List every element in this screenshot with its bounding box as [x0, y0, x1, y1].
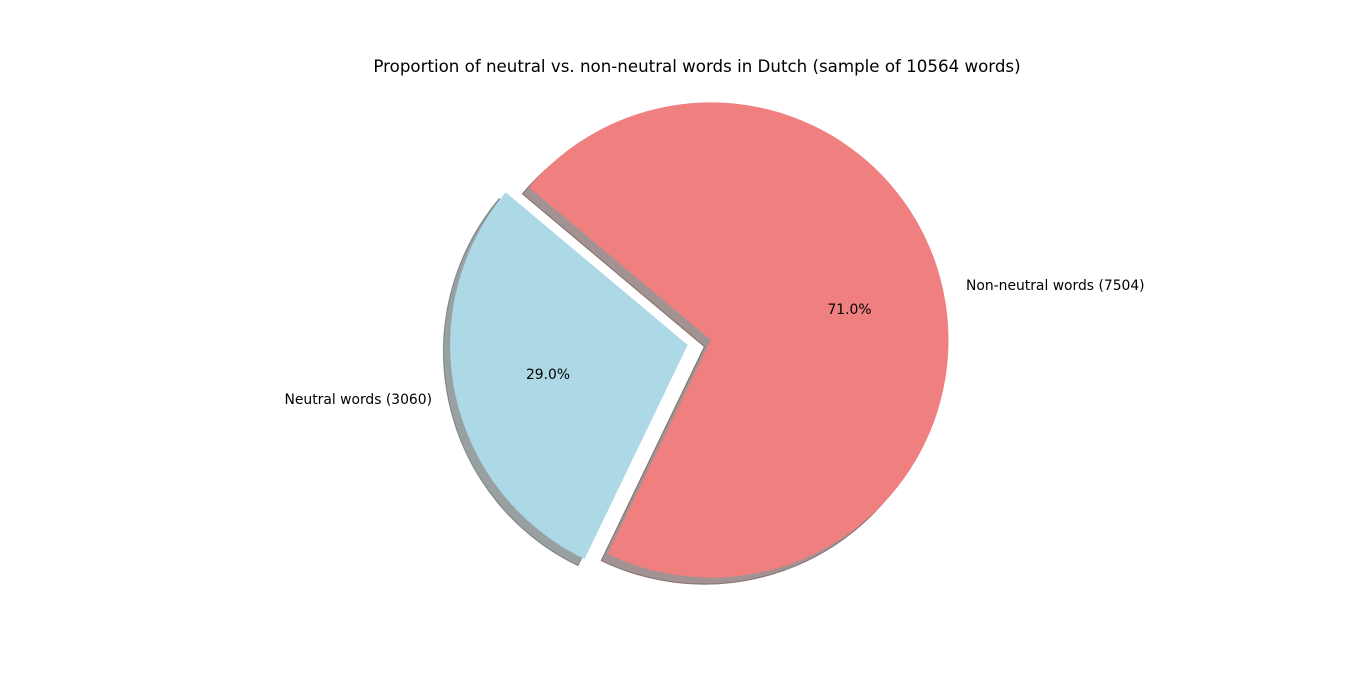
label: non-neutral words: Non-neutral words (7504): [966, 278, 1145, 294]
label: neutral words: Neutral words (3060): [284, 392, 432, 408]
wedge: non-neutral words: [529, 102, 948, 578]
title: Proportion of neutral vs. non-neutral words in Dutch (sample of 10564 words): [373, 57, 1021, 76]
percentage: neutral: 29.0%: [526, 367, 570, 383]
wedge: neutral words: [450, 192, 688, 559]
shadow: neutral wedge: [443, 199, 681, 566]
percentage: non-neutral: 71.0%: [827, 302, 872, 318]
shadow: non-neutral wedge: [522, 109, 942, 584]
